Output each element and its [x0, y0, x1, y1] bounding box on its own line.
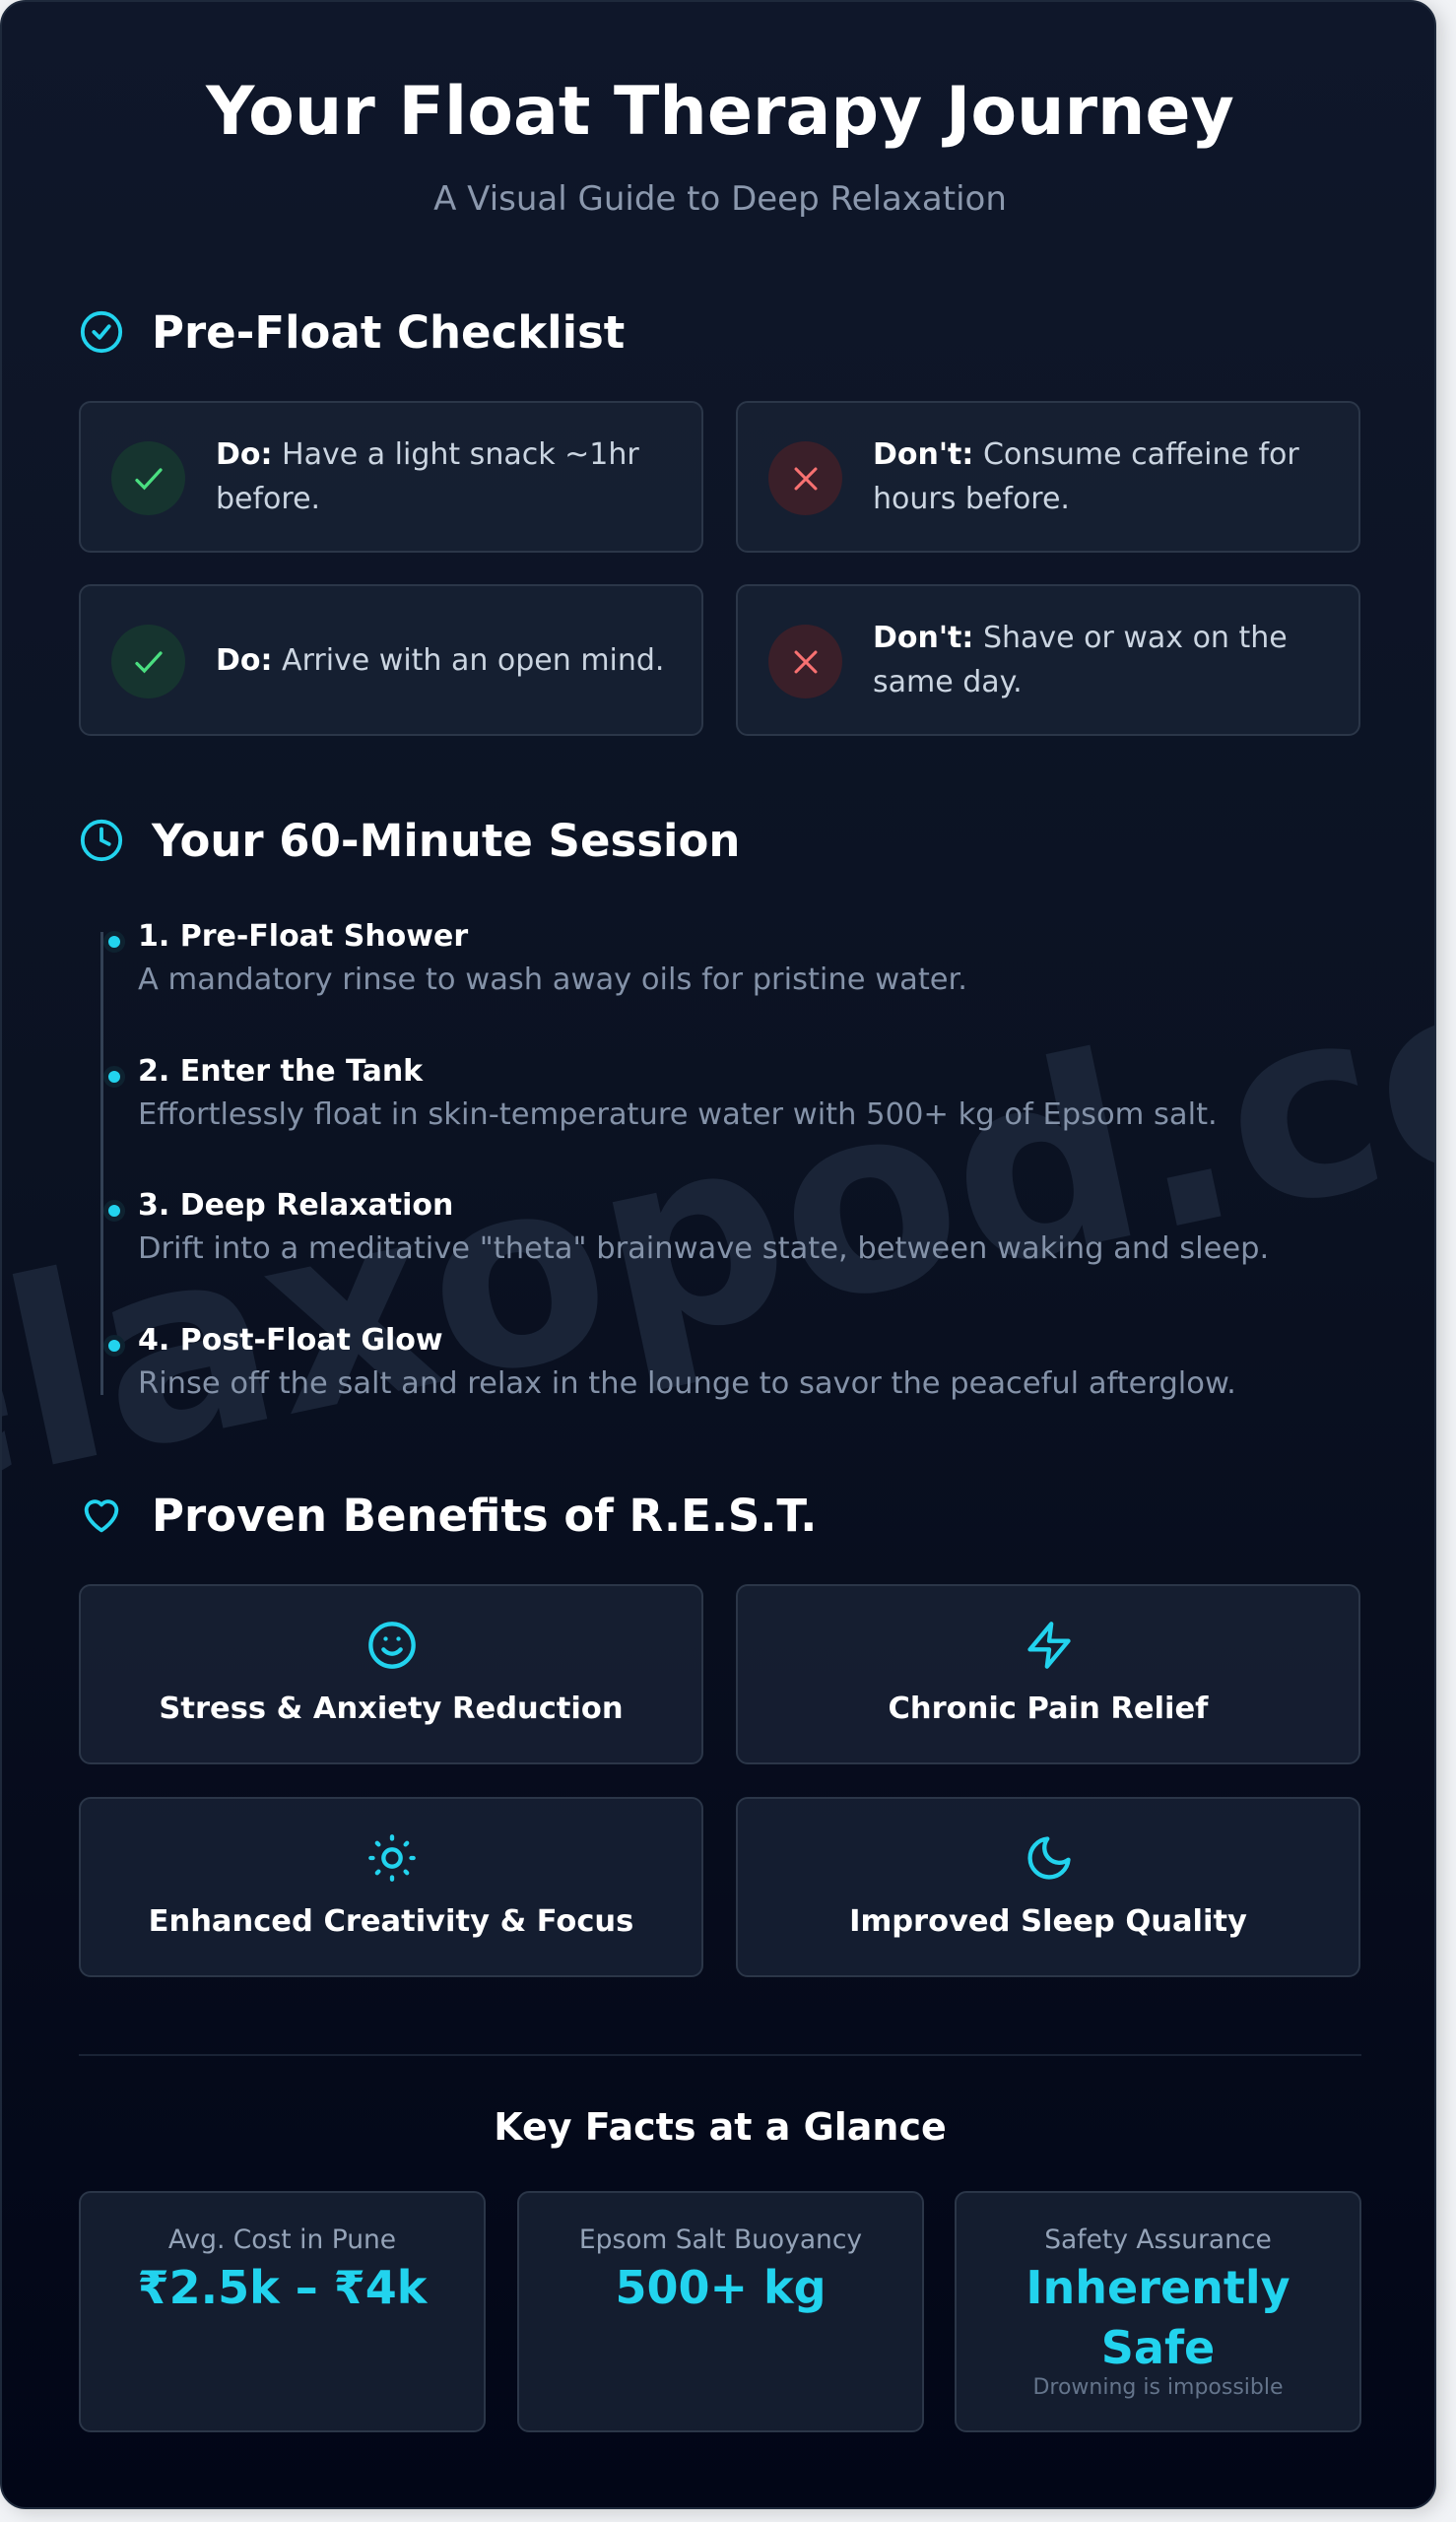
checklist card: don't shave — [736, 584, 1360, 736]
heading: pre-float checklist: Pre-Float Checklist — [152, 305, 625, 359]
step 4: 4. Post-Float Glow — [138, 1323, 443, 1358]
step 2: 2. Enter the Tank — [138, 1054, 423, 1089]
fact: buoyancy — [517, 2191, 924, 2432]
step 1 — [103, 919, 967, 997]
checklist card: don't caffeine: Don't: Consume caffeine for hours before. — [873, 437, 1299, 516]
step 1: A mandatory rinse to wash away oils for pristine water. — [138, 962, 967, 997]
heading: session: Your 60-Minute Session — [152, 814, 740, 867]
benefit: pain — [736, 1584, 1360, 1764]
step 3: 3. Deep Relaxation — [138, 1188, 453, 1223]
fact: safety: Inherently — [1026, 2261, 1291, 2314]
checklist card: don't caffeine — [736, 401, 1360, 553]
benefit: sleep — [736, 1797, 1360, 1977]
fact: buoyancy: Epsom Salt Buoyancy — [579, 2224, 862, 2255]
benefit: sleep: Improved Sleep Quality — [849, 1904, 1247, 1939]
step 2 — [103, 1054, 1218, 1132]
fact: safety — [955, 2191, 1361, 2432]
title: Your Float Therapy Journey — [206, 73, 1234, 151]
step 4 — [103, 1323, 1236, 1401]
benefit: stress: Stress & Anxiety Reduction — [159, 1692, 624, 1726]
checklist card: don't shave: Don't: Shave or wax on the same day. — [873, 621, 1288, 699]
checklist card: do open mind — [79, 584, 703, 736]
fact: safety: Safe — [1101, 2321, 1215, 2374]
fact: cost: Avg. Cost in Pune — [168, 2224, 396, 2255]
benefit: creativity: Enhanced Creativity & Focus — [149, 1904, 633, 1939]
step 3 — [103, 1188, 1269, 1266]
step 3: Drift into a meditative "theta" brainwave state, between waking and sleep. — [138, 1231, 1269, 1266]
fact: safety: Drowning is impossible — [1032, 2375, 1284, 2400]
heading: benefits: Proven Benefits of R.E.S.T. — [152, 1490, 817, 1541]
timeline — [100, 919, 1269, 1401]
benefit: stress — [79, 1584, 703, 1764]
subtitle: A Visual Guide to Deep Relaxation — [433, 179, 1007, 219]
fact: buoyancy: 500+ kg — [615, 2261, 827, 2314]
checklist card: do snack — [79, 401, 703, 553]
fact: cost: ₹2.5k – ₹4k — [138, 2261, 427, 2314]
step 1: 1. Pre-Float Shower — [138, 919, 468, 954]
fact: safety: Safety Assurance — [1044, 2224, 1272, 2255]
step 4: Rinse off the salt and relax in the lounge to savor the peaceful afterglow. — [138, 1366, 1236, 1401]
benefit: pain: Chronic Pain Relief — [889, 1692, 1208, 1726]
step 2: Effortlessly float in skin-temperature water with 500+ kg of Epsom salt. — [138, 1097, 1218, 1132]
checklist card: do snack: Do: Have a light snack ~1hr before. — [216, 437, 639, 516]
benefit: creativity — [79, 1797, 703, 1977]
fact: cost — [79, 2191, 486, 2432]
checklist card: do open mind: Do: Arrive with an open mind. — [216, 643, 664, 678]
heading: key facts: Key Facts at a Glance — [494, 2105, 947, 2149]
